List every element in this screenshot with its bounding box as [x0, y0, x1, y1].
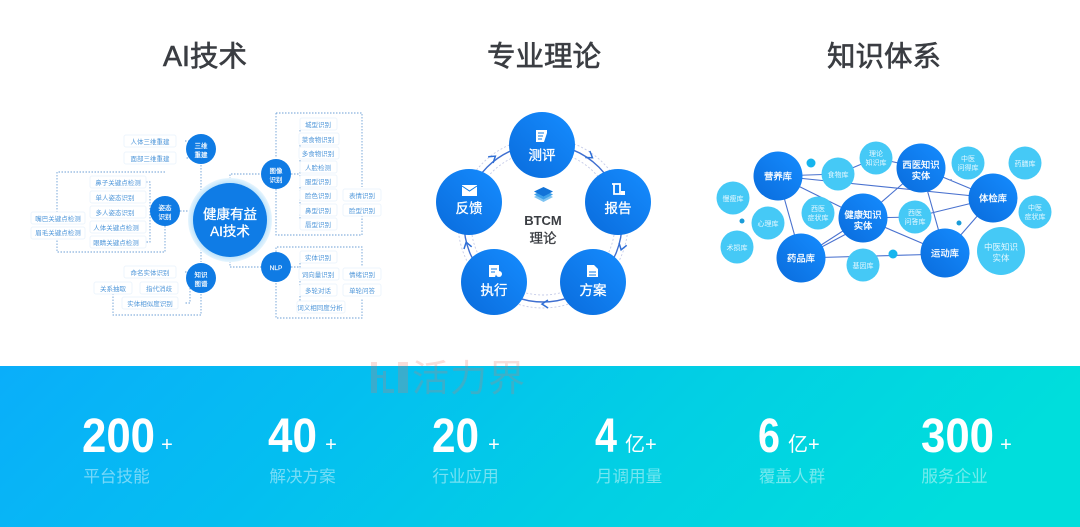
labels: 三维重建: 人体三维重建: [130, 137, 170, 146]
light node: 中医症状库: [1018, 196, 1052, 228]
labels: NLP: 多轮对话: [305, 286, 332, 295]
labels: 图像识别: [299, 118, 381, 230]
labels: 图像识别: 多食物识别: [302, 149, 334, 158]
center text: BTCM 理论: [524, 213, 562, 246]
labels: 图像识别: 唇型识别: [305, 220, 331, 229]
dark node: 药品库: 药品库: [787, 252, 815, 264]
stat: 200+ 平台技能: +: [161, 434, 173, 456]
dark node: 药品库: [776, 234, 826, 282]
stat: 20+ 行业应用: 20: [432, 410, 479, 463]
band: statistics background: [0, 366, 1080, 527]
light node: 药膳库: 药膳库: [1014, 159, 1036, 168]
labels: 图像识别: 服型识别: [305, 177, 331, 186]
step: 测评: [509, 112, 575, 178]
node: 姿态识别: [150, 196, 180, 226]
labels: 姿态识别: 鼻子关键点检测: [95, 178, 141, 187]
heading: 专业理论: 专业理论: [487, 41, 601, 73]
stat: 300+ 服务企业: +: [1000, 434, 1012, 456]
light node: 西医症状库: 症状库: [808, 213, 828, 222]
labels: 图像识别: 人脸检测: [305, 163, 332, 172]
light node: 中医问得库: [952, 146, 984, 180]
node: 姿态识别: 姿态: [158, 203, 172, 212]
labels: 图像识别: 脸型识别: [349, 206, 375, 215]
step: 测评: 测评: [528, 148, 556, 163]
panel: BTCM 专业理论 cycle: [436, 112, 651, 315]
light node: 慢病库: 慢瘦库: [722, 194, 744, 203]
panel: AI技术 mind map: [31, 113, 381, 318]
step: 报告: [585, 169, 651, 235]
stat: 200+ 平台技能: [82, 410, 173, 486]
light node: 中医知识实体: 实体: [992, 253, 1010, 263]
stat: 300+ 服务企业: 300: [921, 410, 994, 463]
stat: 4亿+ 月调用量: [595, 410, 662, 486]
stat: 6亿+ 覆盖人群: 6: [758, 410, 780, 463]
labels: 图像识别: 菜食物识别: [302, 135, 334, 144]
labels: 图像识别: 脸色识别: [305, 191, 331, 200]
light node: 理论知识库: [860, 142, 892, 174]
light node: 术损库: [720, 230, 754, 264]
stat: 6亿+ 覆盖人群: 亿+: [788, 433, 820, 456]
center text: BTCM 理论: 理论: [530, 231, 557, 246]
icon: layers: [534, 187, 553, 202]
stat: 300+ 服务企业: [921, 410, 1012, 486]
arrows: [462, 151, 627, 308]
labels: 姿态识别: 嘴巴关键点检测: [35, 214, 81, 223]
light node: 基因库: 基因库: [852, 261, 874, 270]
light node: 心理库: [752, 206, 784, 240]
dark node: 营养库: [754, 152, 802, 200]
labels: NLP: 情绪识别: [349, 270, 375, 279]
node: 图像识别: 识别: [270, 175, 282, 184]
light node: 中医知识实体: 中医知识: [984, 242, 1018, 252]
labels: NLP: [297, 251, 381, 313]
labels: 知识图谱: 指代消歧: [146, 284, 172, 293]
labels: 姿态识别: 眼睛关键点检测: [93, 238, 139, 247]
stat: 20+ 行业应用: [432, 410, 500, 486]
light node: 理论知识库: 理论: [869, 149, 883, 158]
step: 执行: 执行: [480, 283, 508, 298]
node: 知识图谱: 图谱: [194, 279, 208, 288]
heading: 知识体系: 知识体系: [827, 41, 941, 73]
node: 图像识别: [261, 159, 291, 189]
labels: 姿态识别: 人体关键点检测: [93, 223, 139, 232]
stat: 6亿+ 覆盖人群: [758, 410, 825, 486]
node: 三维重建: [186, 134, 216, 164]
labels: NLP: 实体识别: [305, 253, 331, 262]
light node: 慢病库: [716, 182, 750, 214]
stat: 4亿+ 月调用量: 亿+: [625, 433, 657, 456]
stat: 40+ 解决方案: 40: [268, 410, 317, 463]
labels: 三维重建: [124, 135, 176, 164]
stat: 200+ 平台技能: 200: [82, 410, 155, 463]
light node: 药膳库: [1008, 146, 1042, 180]
dark node: 运动库: 运动库: [931, 248, 959, 258]
light node: 西医症状库: [802, 196, 834, 230]
labels: NLP: 词义相同度分析: [297, 303, 343, 312]
main node: 健康有益AI技术: 健康有益: [203, 206, 257, 222]
light node: 西医问答库: 西医: [908, 209, 922, 217]
light node: 西医问答库: [898, 200, 932, 234]
labels: 图像识别: 鼻型识别: [305, 206, 331, 215]
stat: 40+ 解决方案: 解决方案: [269, 467, 336, 486]
node: 图像识别: 图像: [270, 166, 283, 175]
dark node: 西医知识实体: [896, 144, 946, 192]
node: NLP: [261, 252, 291, 282]
step: 反馈: [436, 169, 502, 235]
labels: 知识图谱: [94, 266, 178, 309]
light node: 中医问得库: 中医: [961, 154, 975, 163]
light node: 中医症状库: 中医: [1028, 203, 1042, 212]
step: 方案: [560, 249, 626, 315]
labels: 知识图谱: 实体相似度识别: [127, 299, 173, 308]
labels: NLP: 词向量识别: [302, 270, 334, 279]
light node: 西医症状库: 西医: [811, 205, 825, 213]
dark node: 体检库: 体检库: [979, 192, 1007, 204]
step: 执行: [461, 249, 527, 315]
dark node: 西医知识实体: 西医知识: [902, 159, 940, 170]
stat: 4亿+ 月调用量: 4: [595, 410, 617, 463]
step: 方案: 方案: [580, 282, 607, 298]
light node: 术损库: 术损库: [726, 243, 748, 252]
light node: 理论知识库: 知识库: [866, 158, 886, 167]
stat: 40+ 解决方案: +: [325, 434, 337, 456]
node: NLP: NLP: [270, 265, 282, 272]
heading: AI技术: AI技术: [163, 41, 247, 73]
node: 知识图谱: 知识: [194, 270, 208, 279]
labels: 姿态识别: 眉毛关键点检测: [35, 228, 81, 237]
main node: 健康有益AI技术: [188, 178, 272, 262]
light node: 中医知识实体: [977, 227, 1025, 275]
watermark: 活力界: [412, 358, 526, 399]
dark node: 体检库: [968, 174, 1018, 222]
stat: 40+ 解决方案: [268, 410, 337, 486]
dark node: 运动库: [920, 228, 970, 278]
stat: 4亿+ 月调用量: 月调用量: [596, 467, 662, 486]
connectors: [57, 113, 362, 318]
light node: 中医问得库: 问得库: [958, 163, 978, 172]
labels: NLP: 单轮问答: [349, 286, 376, 295]
stat: 6亿+ 覆盖人群: 覆盖人群: [759, 467, 825, 486]
center text: BTCM 理论: BTCM: [524, 213, 562, 228]
light node: 中医症状库: 症状库: [1024, 212, 1046, 221]
labels: 姿态识别: [31, 176, 146, 248]
dark node: 健康知识实体: 健康知识: [844, 209, 882, 220]
main node: 健康有益AI技术: AI技术: [210, 224, 250, 239]
ring: [458, 138, 628, 308]
dark node: 健康知识实体: [838, 194, 888, 242]
labels: 姿态识别: 多人姿态识别: [96, 208, 134, 217]
light node: 基因库: [846, 248, 880, 282]
panel: 知识体系 network: [716, 142, 1052, 282]
labels: 图像识别: 城型识别: [305, 120, 331, 129]
network links: [778, 158, 993, 258]
node: 三维重建: 重建: [194, 150, 208, 159]
labels: 知识图谱: 关系抽取: [100, 284, 126, 293]
node: 姿态识别: 识别: [158, 212, 172, 221]
small dots: [740, 158, 962, 258]
dark node: 西医知识实体: 实体: [912, 170, 931, 181]
light node: 食物库: 食物库: [828, 170, 848, 179]
node: 三维重建: 三维: [194, 141, 208, 150]
stat: 300+ 服务企业: 服务企业: [921, 467, 988, 486]
labels: 姿态识别: 单人姿态识别: [96, 193, 134, 202]
stat: 20+ 行业应用: 行业应用: [432, 467, 499, 486]
light node: 西医问答库: 问答库: [904, 217, 926, 226]
labels: 三维重建: 面部三维重建: [130, 154, 170, 163]
labels: 知识图谱: 命名实体识别: [130, 268, 170, 277]
step: 反馈: 反馈: [456, 201, 482, 216]
dark node: 健康知识实体: 实体: [854, 220, 873, 231]
node: 知识图谱: [186, 263, 216, 293]
light node: 食物库: [822, 158, 854, 190]
step: 报告: 报告: [604, 201, 632, 216]
stat: 200+ 平台技能: 平台技能: [83, 467, 150, 486]
dark node: 营养库: 营养库: [764, 170, 792, 182]
labels: 图像识别: 表情识别: [349, 191, 375, 200]
light node: 心理库: 心理库: [758, 219, 778, 228]
stat: 20+ 行业应用: +: [488, 434, 500, 456]
